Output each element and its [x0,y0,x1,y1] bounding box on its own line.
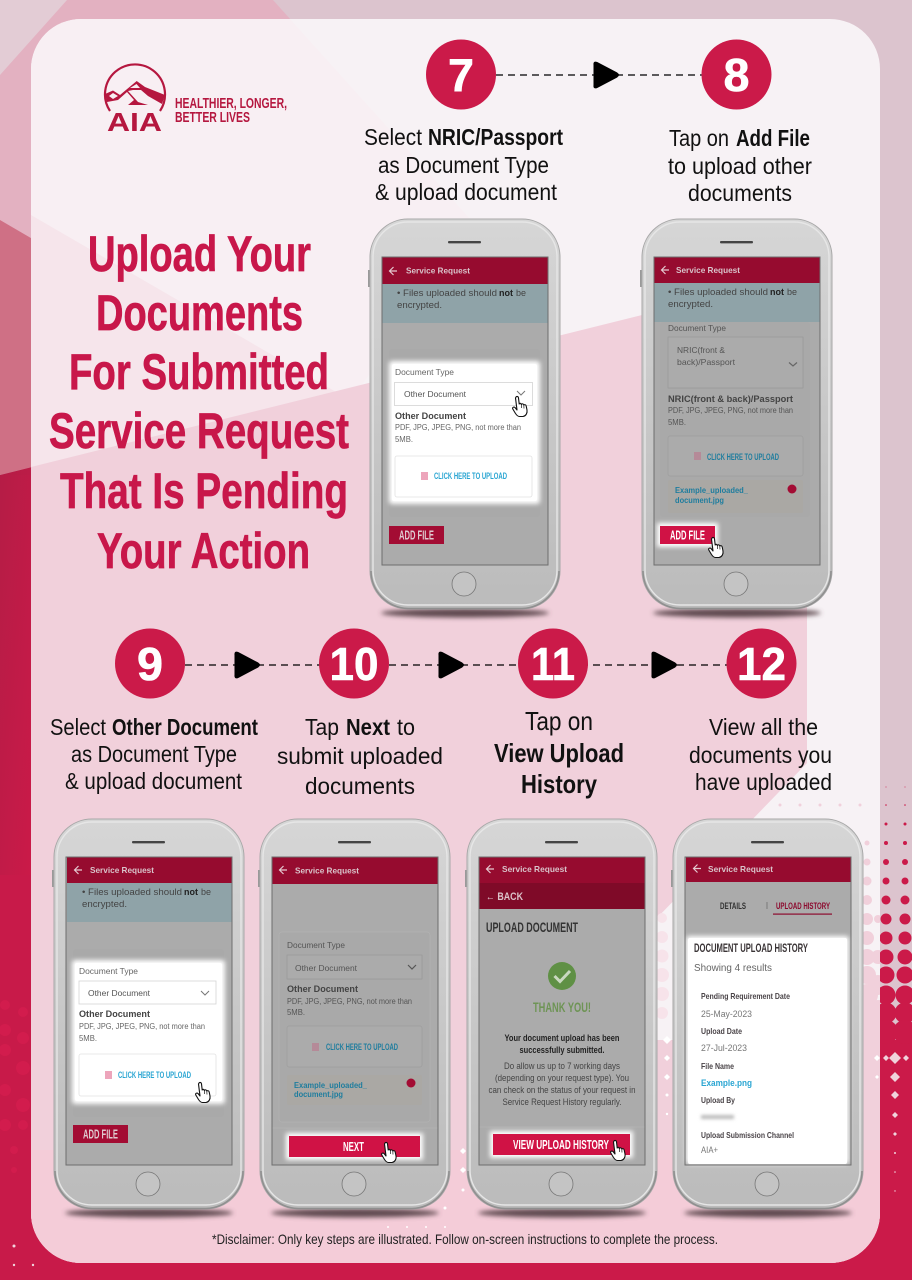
highlighted upload history: Upload Submission Channel [701,1130,794,1140]
upload form: Example_uploaded_ [294,1080,367,1090]
add file button: ADD FILE [670,528,705,542]
highlighted upload history: Pending Requirement Date [701,991,790,1001]
caption: step 9 [50,714,258,794]
highlighted upload history: File Name [701,1061,734,1071]
next button: NEXT [343,1140,364,1154]
app header [479,857,645,883]
upload form: Other Document [287,984,358,994]
app header [272,857,438,884]
title: Service Request [49,403,349,459]
notice band: be [787,287,797,297]
step number 7: 7 [448,49,474,101]
upload document heading: UPLOAD DOCUMENT [486,919,578,935]
caption: step 9: Other Document [112,714,258,740]
upload form: NRIC(front & [677,345,725,355]
step number 10: 10 [330,638,378,690]
upload form: 5MB. [287,1008,305,1017]
highlighted form: 5MB. [79,1034,97,1043]
notice band: be [201,887,211,897]
thank you text: THANK YOU! [533,999,591,1015]
caption: step 11: Tap on [525,706,593,736]
notice band: encrypted. [668,299,713,309]
upload form: Document Type [668,323,726,333]
highlighted upload history: Showing 4 results [694,963,772,974]
highlighted upload history [686,936,849,1164]
caption: step 9: & upload document [65,768,242,794]
icon: tap hand [709,537,723,558]
caption: step 9: as Document Type [71,741,237,767]
app header: Service Request [676,265,740,275]
highlighted form: PDF, JPG, JPEG, PNG, not more than [395,423,521,432]
phone: step 10 [258,819,450,1218]
highlighted upload history: 27-Jul-2023 [701,1043,747,1053]
highlighted upload history: Upload By [701,1095,735,1105]
upload form: NRIC(front & back)/Passport [668,394,793,404]
step number 11: 11 [531,638,575,690]
icon: tap hand [382,1142,396,1162]
caption: step 12: have uploaded [695,769,832,795]
upload form: PDF, JPG, JPEG, PNG, not more than [668,406,793,415]
step number 12: 12 [737,638,786,690]
next button [286,1133,423,1160]
add file button [389,526,444,544]
highlighted upload history: 25-May-2023 [701,1009,752,1019]
highlighted form: Document Type [79,966,138,976]
icon: tap hand [513,396,527,416]
highlighted form: CLICK HERE TO UPLOAD [118,1070,191,1081]
highlighted form [389,361,540,504]
app header [67,857,232,883]
caption: step 10: submit uploaded [277,743,443,769]
view upload history button [490,1131,633,1158]
caption: step 9: Select [50,714,106,740]
caption: step 8: to upload other [668,153,812,179]
app header: Service Request [295,866,359,876]
icon: tap hand [196,1082,210,1102]
upload form [279,932,430,1122]
app header: Service Request [708,864,773,874]
caption: step 10: documents [305,773,415,799]
upload form: Example_uploaded_ [675,485,748,495]
caption: step 11: History [521,769,597,799]
success message: (depending on your request type). You [495,1073,629,1083]
disclaimer: *Disclaimer: Only key steps are illustrated. Follow on-screen instructions to complete the process. [212,1231,718,1247]
caption: step 10 [277,714,443,799]
tabs: DETAILS [720,901,746,912]
step number 8: 8 [724,49,750,101]
title: Your Action [97,523,310,579]
caption: step 7: & upload document [375,179,557,205]
tagline: HEALTHIER, LONGER, [175,96,287,112]
highlighted form: PDF, JPG, JPEG, PNG, not more than [79,1022,205,1031]
success message [488,1033,636,1107]
success message: Service Request History regularly. [502,1097,622,1107]
tabs: UPLOAD HISTORY [776,901,830,912]
step number 8 [702,40,772,110]
highlighted upload history: Example.png [701,1078,752,1089]
phone: step 7 [368,219,560,618]
app header: Service Request [502,864,567,874]
add file button [73,1125,128,1143]
upload form: Other Document [295,963,358,973]
caption: step 7: NRIC/Passport [428,124,563,150]
title: For Submitted [69,344,329,400]
notice band: be [516,288,526,298]
notice band: not [770,287,784,297]
caption: step 10: to [397,714,415,740]
notice band: • Files uploaded should [82,887,182,897]
logo: AIA [105,64,287,137]
back bar [479,883,645,909]
app header: Service Request [406,266,470,276]
upload form [660,322,810,517]
icon: success check [548,962,576,990]
caption: step 11: View Upload [494,738,624,768]
title: Upload Your [88,226,311,282]
caption: step 7: Select [364,124,422,150]
phone: step 11 [465,819,657,1218]
step number 11 [518,628,588,698]
caption: step 8: Add File [736,125,810,151]
tabs [720,901,832,915]
caption: step 8: documents [688,180,792,206]
notice band: not [184,887,198,897]
add file button: ADD FILE [399,528,434,542]
step number 9: 9 [137,638,163,690]
icon: mountain emblem [105,64,165,137]
highlighted form: Other Document [88,988,151,998]
notice band: encrypted. [82,899,127,909]
step number 12 [726,628,796,698]
notice band [382,284,548,323]
back bar: ← BACK [486,891,523,903]
title: Documents [96,285,303,341]
caption: step 7 [364,124,563,205]
step number 9 [115,628,185,698]
caption: step 10: Next [346,714,390,740]
upload form: back)/Passport [677,357,736,367]
connector: step 7 to 8 [496,62,702,88]
success message: successfully submitted. [520,1045,604,1055]
tagline [175,96,287,126]
tagline: BETTER LIVES [175,110,250,126]
phone: step 8 [640,219,832,618]
highlighted form: Other Document [79,1009,150,1019]
upload form: CLICK HERE TO UPLOAD [707,452,779,463]
title [49,226,349,579]
step number 7 [426,40,496,110]
notice band: encrypted. [397,300,442,310]
caption: step 12: documents you [689,742,832,768]
app header [686,857,851,882]
success message: Do allow us up to 7 working days [504,1061,620,1071]
upload form: document.jpg [294,1089,343,1099]
caption: step 12 [689,714,832,795]
highlighted form [72,960,225,1104]
highlighted form: CLICK HERE TO UPLOAD [434,471,507,482]
app header: Service Request [90,865,154,875]
caption: step 11 [494,706,624,799]
upload form: document.jpg [675,495,724,505]
app header [654,257,820,283]
highlighted form: Other Document [404,389,467,399]
notice band: • Files uploaded should [668,287,768,297]
success message: can check on the status of your request in [488,1085,636,1095]
upload form: CLICK HERE TO UPLOAD [326,1042,398,1053]
view upload history button: VIEW UPLOAD HISTORY [513,1138,609,1152]
highlighted upload history: Upload Date [701,1026,742,1036]
phone: step 12 [671,819,863,1218]
success message: Your document upload has been [504,1033,620,1043]
notice band [654,283,820,322]
icon: tap hand [611,1140,625,1160]
notice band: not [499,288,513,298]
caption: step 8: Tap on [669,125,729,151]
title: That Is Pending [60,463,348,519]
add file button [657,523,718,547]
caption: step 8 [668,125,812,206]
highlighted form: Document Type [395,367,454,377]
connector: steps 9 to 12 [185,652,727,678]
phone: step 9 [52,819,244,1218]
icon: mountain emblem: AIA [107,107,162,137]
notice band: • Files uploaded should [397,288,497,298]
highlighted form: 5MB. [395,435,413,444]
notice band [67,883,232,922]
upload form: PDF, JPG, JPEG, PNG, not more than [287,997,412,1006]
app header [382,257,548,284]
highlighted upload history: DOCUMENT UPLOAD HISTORY [694,941,808,955]
highlighted form: Other Document [395,411,466,421]
upload form: 5MB. [668,418,686,427]
caption: step 10: Tap [305,714,339,740]
caption: step 7: as Document Type [378,152,549,178]
upload form: Document Type [287,940,345,950]
highlighted upload history: AIA+ [701,1145,718,1155]
caption: step 12: View all the [709,714,818,740]
step number 10 [319,628,389,698]
background: outer halftone dots [0,786,912,1266]
add file button: ADD FILE [83,1128,118,1142]
